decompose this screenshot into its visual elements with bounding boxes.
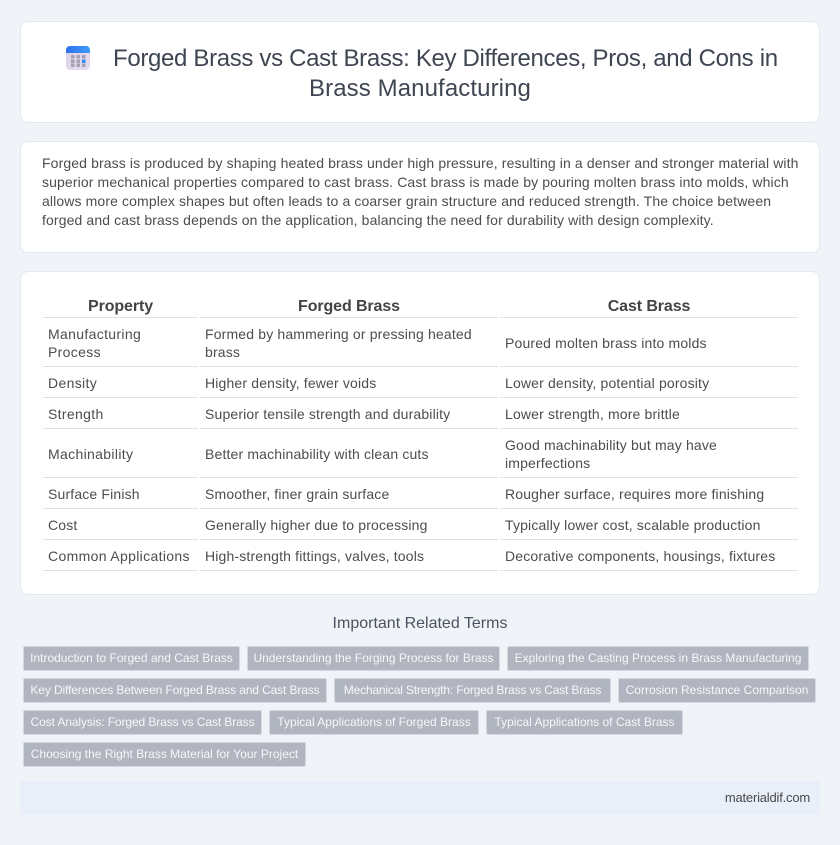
title: Brass Manufacturing bbox=[309, 75, 531, 102]
table header: Cast Brass bbox=[608, 298, 690, 315]
row: density: Higher density, fewer voids bbox=[205, 375, 376, 391]
row: manufacturing process: Process bbox=[48, 344, 101, 360]
footer bar bbox=[20, 781, 820, 815]
row: manufacturing process: Poured molten brass into molds bbox=[505, 335, 707, 351]
row: common applications: Decorative components, housings, fixtures bbox=[505, 548, 775, 564]
related terms heading: Important Related Terms bbox=[333, 615, 507, 632]
row: common applications bbox=[48, 548, 775, 564]
row: density: Density bbox=[48, 375, 97, 391]
related terms tags: Choosing the Right Brass Material for Your Project bbox=[31, 747, 298, 761]
intro text: superior mechanical properties compared to cast brass. Cast brass is made by pouring molten brass into molds, which bbox=[42, 174, 789, 190]
row: common applications: Common Applications bbox=[48, 548, 190, 564]
intro text bbox=[42, 155, 799, 228]
row: manufacturing process bbox=[48, 326, 707, 360]
related terms tags: Typical Applications of Cast Brass bbox=[494, 715, 675, 729]
row: machinability: Better machinability with clean cuts bbox=[205, 446, 429, 462]
row: cost: Typically lower cost, scalable production bbox=[505, 517, 761, 533]
row: surface finish: Surface Finish bbox=[48, 486, 140, 502]
row: surface finish: Smoother, finer grain surface bbox=[205, 486, 389, 502]
row: strength bbox=[48, 406, 680, 422]
related terms tags bbox=[23, 646, 816, 767]
row: strength: Strength bbox=[48, 406, 104, 422]
intro text: forged and cast brass depends on the application, balancing the need for durability with design complexity. bbox=[42, 212, 714, 228]
panel: comparison table bbox=[20, 271, 820, 595]
row: cost: Cost bbox=[48, 517, 77, 533]
header panel bbox=[20, 21, 820, 123]
title bbox=[113, 45, 778, 102]
related terms tags: Key Differences Between Forged Brass and Cast Brass bbox=[30, 683, 320, 697]
row: surface finish bbox=[48, 486, 764, 502]
related terms tags: Typical Applications of Forged Brass bbox=[277, 715, 471, 729]
icon: calendar bbox=[66, 46, 90, 70]
row: common applications: High-strength fittings, valves, tools bbox=[205, 548, 424, 564]
table header: Property bbox=[88, 298, 153, 315]
row: density: Lower density, potential porosity bbox=[505, 375, 709, 391]
row: machinability bbox=[48, 437, 717, 471]
panel: intro paragraph bbox=[20, 141, 820, 253]
row: surface finish: Rougher surface, requires more finishing bbox=[505, 486, 764, 502]
related terms tags: Understanding the Forging Process for Brass bbox=[253, 651, 494, 665]
row: manufacturing process: brass bbox=[205, 344, 240, 360]
intro text: allows more complex shapes but often leads to a coarser grain structure and reduced strength. The choice between bbox=[42, 193, 771, 209]
table header bbox=[88, 298, 690, 315]
row: cost: Generally higher due to processing bbox=[205, 517, 428, 533]
comparison table bbox=[43, 298, 798, 571]
row: cost bbox=[48, 517, 761, 533]
title: Forged Brass vs Cast Brass: Key Differences, Pros, and Cons in bbox=[113, 45, 778, 72]
row: machinability: Good machinability but may have bbox=[505, 437, 717, 453]
row: manufacturing process: Formed by hammering or pressing heated bbox=[205, 326, 472, 342]
footer source: materialdif.com bbox=[725, 790, 810, 805]
row: density bbox=[48, 375, 710, 391]
related terms tags: Introduction to Forged and Cast Brass bbox=[30, 651, 233, 665]
intro text: Forged brass is produced by shaping heated brass under high pressure, resulting in a denser and stronger material with bbox=[42, 155, 799, 171]
row: strength: Lower strength, more brittle bbox=[505, 406, 680, 422]
table header: Forged Brass bbox=[298, 298, 400, 315]
row: strength: Superior tensile strength and durability bbox=[205, 406, 450, 422]
row: machinability: imperfections bbox=[505, 455, 590, 471]
related terms tags: Corrosion Resistance Comparison bbox=[626, 683, 808, 697]
related terms tags: Cost Analysis: Forged Brass vs Cast Brass bbox=[30, 715, 254, 729]
row: manufacturing process: Manufacturing bbox=[48, 326, 141, 342]
related terms tags: Exploring the Casting Process in Brass Manufacturing bbox=[515, 651, 801, 665]
row: machinability: Machinability bbox=[48, 446, 133, 462]
related terms tags: Mechanical Strength: Forged Brass vs Cast Brass bbox=[344, 683, 601, 697]
